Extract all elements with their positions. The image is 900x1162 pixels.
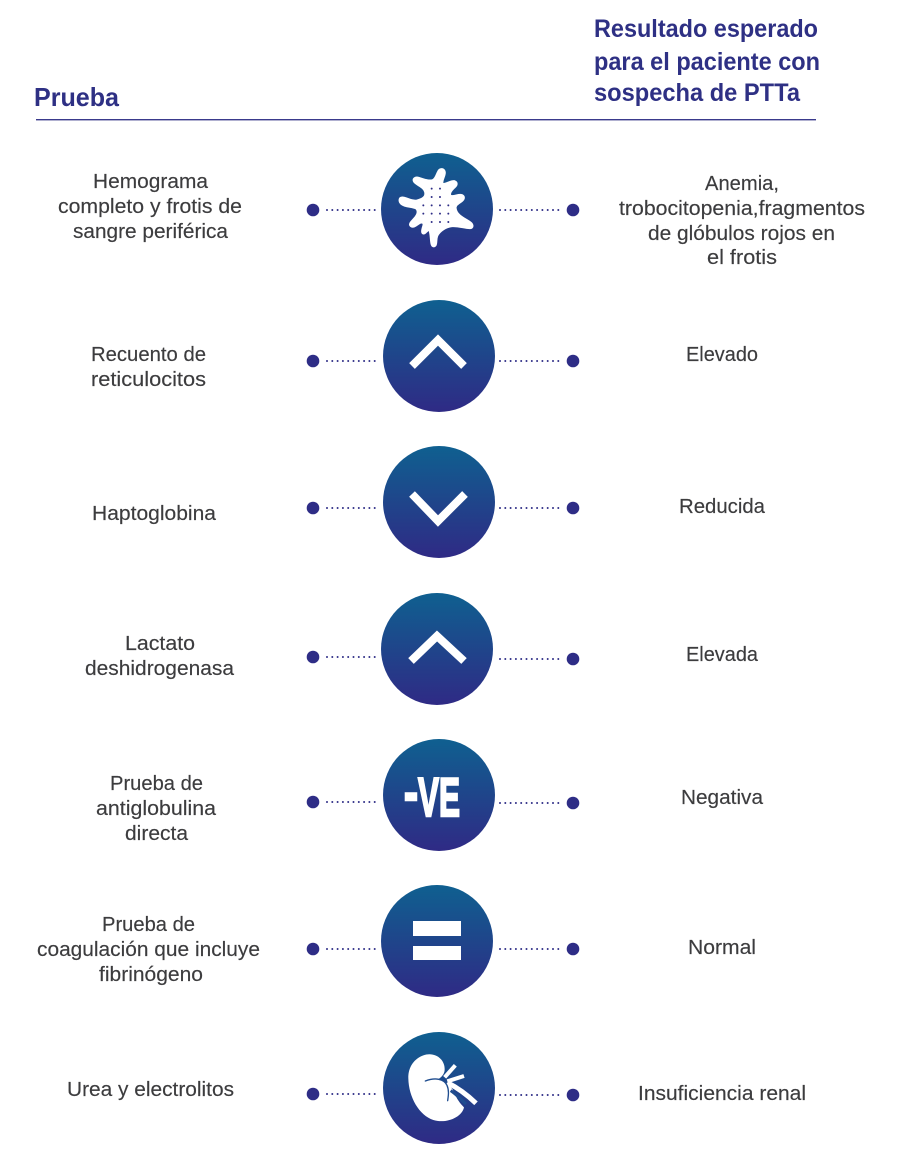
text: expected result: Negativa [681,787,764,809]
text: expected result [619,173,865,269]
icon: negative [383,739,495,851]
connector: left [307,651,376,663]
text: test name: deshidrogenasa [85,658,235,680]
text: expected result: Anemia, [705,173,779,195]
row: Prueba de antiglobulina directa [96,739,764,851]
icon: down arrow [383,446,495,558]
connector: left [307,204,376,216]
connector: right [500,1089,579,1101]
text: test name: coagulación que incluye [37,939,260,961]
text: expected result: Elevada [686,644,759,666]
text: expected result: trobocitopenia,fragmentos [619,198,865,220]
text: test name [85,633,235,680]
connector: right [500,797,579,809]
row: Recuento de reticulocitos [91,300,758,412]
icon: negative: VE [418,766,460,828]
icon: kidney [383,1032,495,1144]
text: test name: Urea y electrolitos [67,1079,234,1101]
icon: negative: - [404,761,418,823]
row: Prueba de coagulación [37,885,756,997]
connector: right [500,653,579,665]
heading: Resultado esperado [594,15,820,107]
row: Haptoglobina [92,446,766,558]
text: test name: sangre periférica [73,221,229,243]
connector: right [500,204,579,216]
connector: right [500,355,579,367]
text: test name [96,773,217,845]
text: test name: reticulocitos [91,369,206,391]
text: expected result: de glóbulos rojos en [648,223,835,245]
text: test name: Haptoglobina [92,503,217,525]
text: test name: Lactato [125,633,195,655]
text: test name: completo y frotis de [58,196,242,218]
text: expected result: el frotis [707,247,777,269]
icon: equals [381,885,493,997]
connector: left [307,502,376,514]
text: test name [58,171,242,243]
heading: Resultado esperado: sospecha de PTTa [594,79,801,107]
text: test name [37,914,260,986]
text: expected result: Elevado [686,344,758,366]
text: expected result: Insuficiencia renal [638,1083,806,1105]
row: Urea y electrolitos [67,1032,806,1144]
connector: left [307,1088,376,1100]
row: Hemograma [58,153,865,269]
connector: left [307,796,376,808]
text: expected result: Reducida [679,496,766,518]
heading: Resultado esperado: para el paciente con [594,48,820,76]
text: test name: directa [125,823,189,845]
heading: Resultado esperado: Resultado esperado [594,15,818,43]
icon: up arrow [381,593,493,705]
connector: left [307,943,376,955]
icon: blood cell [381,153,493,265]
text: test name: Recuento de [91,344,206,366]
text: test name: Prueba de [110,773,203,795]
connector: right [500,943,579,955]
connector: right [500,502,579,514]
text: test name: fibrinógeno [99,964,203,986]
row: Lactato deshidrogenasa [85,593,759,705]
text: expected result: Normal [688,937,756,959]
text: test name [91,344,206,391]
icon: up arrow [383,300,495,412]
text: test name: Prueba de [102,914,195,936]
text: test name: antiglobulina [96,798,217,820]
connector: left [307,355,376,367]
text: test name: Hemograma [93,171,209,193]
heading: Prueba: Prueba [34,82,120,112]
